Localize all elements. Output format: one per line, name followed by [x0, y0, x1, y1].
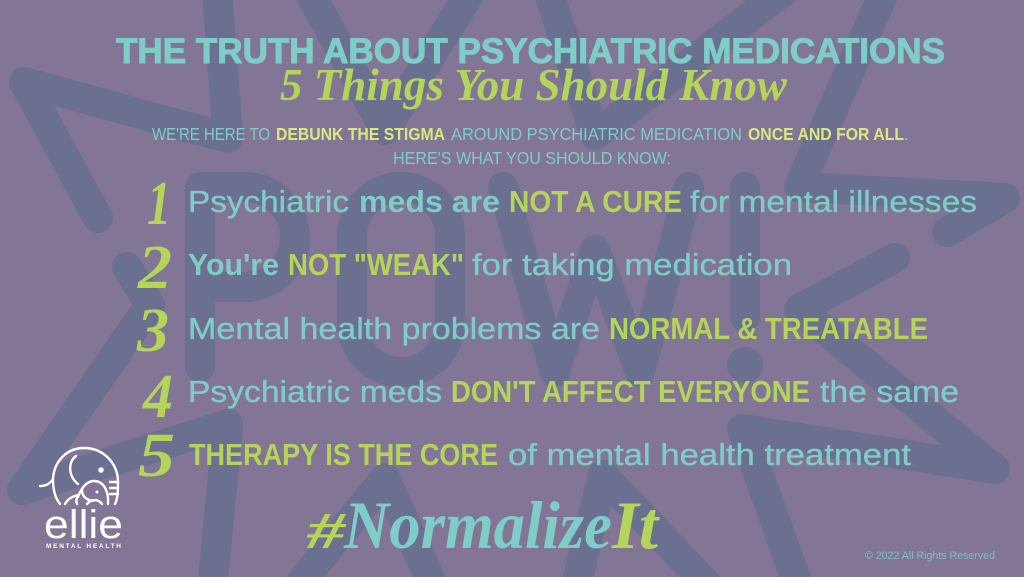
list item 1: Psychiatric: [188, 185, 349, 219]
list item 4: DON'T AFFECT EVERYONE: [451, 375, 810, 409]
list item 1: 1: [147, 170, 171, 238]
list item 4: the same: [820, 375, 959, 409]
intro text: HERE'S WHAT YOU SHOULD KNOW:: [393, 148, 671, 168]
list item 2: for taking medication: [472, 248, 792, 282]
list item 1: NOT A CURE: [509, 185, 682, 219]
list item 3: 3: [136, 297, 169, 365]
list item 1: for mental illnesses: [690, 185, 977, 219]
list item 2: You're: [188, 248, 279, 282]
list item 3: [136, 297, 928, 365]
list item 4: 4: [142, 363, 173, 431]
list item 1: meds are: [359, 185, 500, 219]
list item 5: of mental health treatment: [508, 438, 912, 472]
intro text: WE'RE HERE TO: [152, 124, 270, 144]
title: THE TRUTH ABOUT PSYCHIATRIC MEDICATIONS: [116, 32, 945, 71]
script subtitle: 5 Things You Should Know: [280, 59, 787, 110]
list item 2: [137, 234, 792, 302]
intro text: AROUND PSYCHIATRIC MEDICATION: [451, 124, 742, 144]
list item 3: Mental health problems are: [188, 312, 600, 346]
list item 3: NORMAL & TREATABLE: [609, 312, 928, 346]
list item 5: [138, 422, 912, 490]
hashtag: Normalize: [343, 487, 612, 563]
logo wordmark: ellie: [44, 503, 123, 547]
intro text: DEBUNK THE STIGMA: [276, 124, 445, 144]
intro text: [152, 124, 909, 168]
intro text: ONCE AND FOR ALL: [748, 124, 904, 144]
list item 5: 5: [138, 422, 175, 490]
list item 4: [142, 363, 959, 431]
list item 2: NOT "WEAK": [288, 248, 464, 282]
list item 2: 2: [137, 234, 172, 302]
logo: ellie mental health: [40, 448, 123, 550]
hashtag: #: [306, 503, 346, 560]
list item 4: Psychiatric meds: [188, 375, 442, 409]
intro text: .: [904, 124, 909, 144]
icon: elephant: [40, 448, 118, 504]
copyright: © 2022 All Rights Reserved: [865, 550, 995, 562]
logo tagline: MENTAL HEALTH: [46, 543, 121, 550]
hashtag: It: [611, 487, 660, 563]
list item 1: [147, 170, 977, 238]
list item 5: THERAPY IS THE CORE: [189, 438, 498, 472]
